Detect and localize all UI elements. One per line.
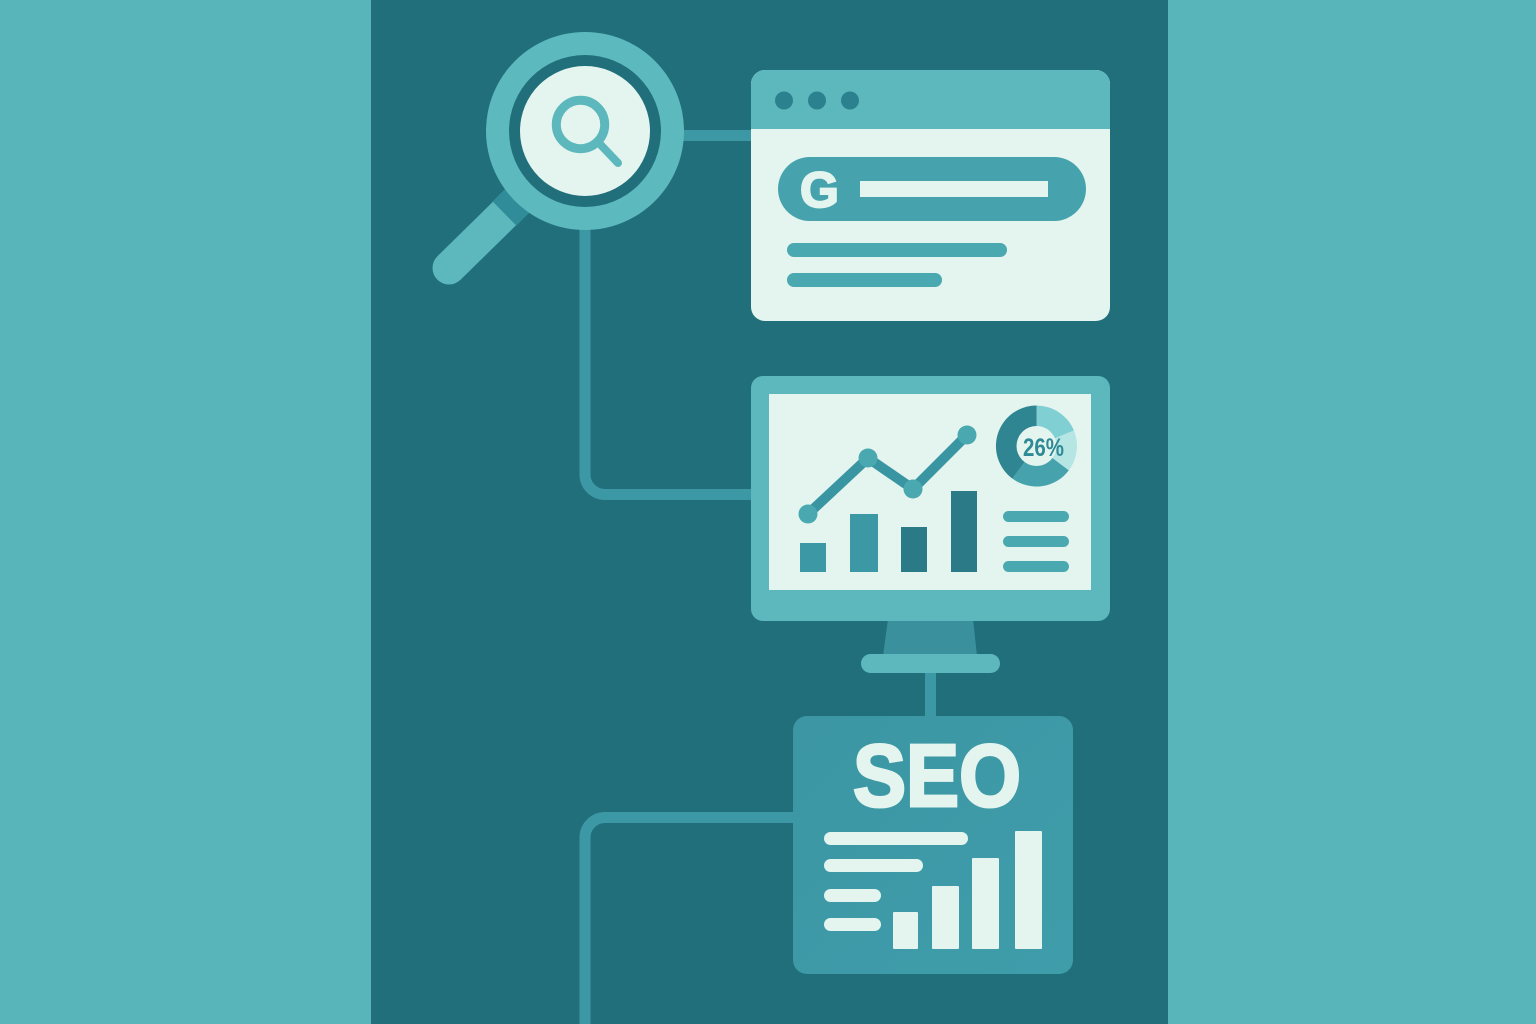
monitor frame xyxy=(751,376,1110,621)
legend lines xyxy=(1003,511,1069,572)
heading: SEO: SEO xyxy=(853,726,1021,825)
report text lines xyxy=(824,832,968,931)
monitor stand neck xyxy=(883,619,977,656)
connector: SEO panel to bottom edge xyxy=(585,818,797,1024)
search bar pill xyxy=(778,157,1086,221)
result line one xyxy=(787,243,1007,257)
bar chart xyxy=(800,491,977,572)
donut chart xyxy=(996,405,1077,487)
icon: small search glass xyxy=(556,100,618,163)
monitor stand base xyxy=(861,654,1000,673)
magnifier lens xyxy=(520,66,650,196)
connector: monitor to SEO panel xyxy=(925,670,936,720)
background: central dark column xyxy=(371,0,1168,1024)
browser body xyxy=(751,70,1110,321)
search input field xyxy=(860,181,1048,197)
browser window dots xyxy=(775,92,859,110)
SEO panel background xyxy=(793,716,1073,974)
donut percentage: 26% xyxy=(1023,434,1064,462)
result line two xyxy=(787,273,942,287)
magnifier handle grip xyxy=(432,214,504,284)
monitor screen xyxy=(769,394,1091,590)
magnifier inner dark ring xyxy=(509,55,661,207)
rising bar chart xyxy=(893,831,1042,949)
magnifier handle neck xyxy=(504,192,526,214)
connector: magnifier to monitor xyxy=(585,225,755,495)
magnifier outer ring xyxy=(486,32,684,230)
connector: magnifier to browser xyxy=(680,130,755,141)
icon: large magnifying glass xyxy=(432,32,684,284)
line chart xyxy=(798,426,976,524)
icon: G logo: G xyxy=(800,162,839,218)
panel: SEO report xyxy=(793,716,1073,974)
browser title bar xyxy=(751,70,1110,129)
panel: analytics monitor xyxy=(751,376,1110,673)
panel: browser search window xyxy=(751,70,1110,321)
